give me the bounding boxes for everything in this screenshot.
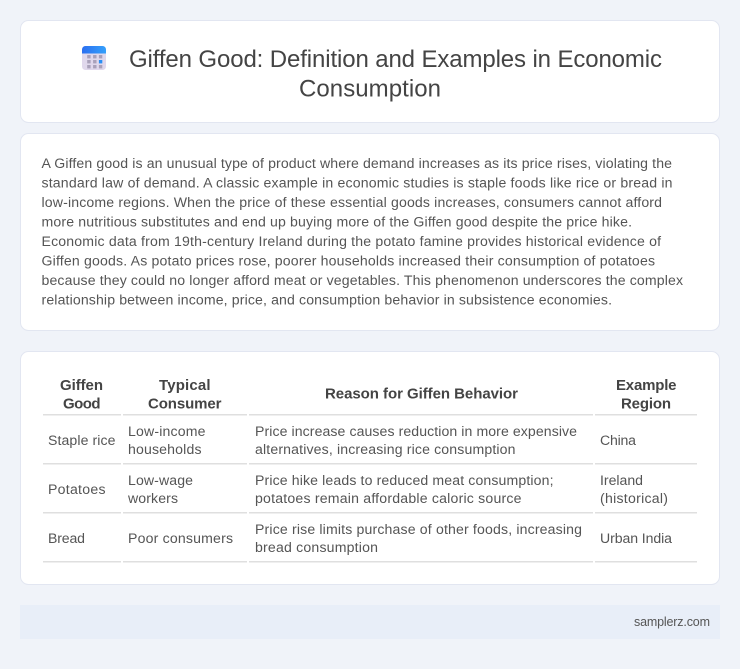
table row: bread: Urban India	[600, 530, 672, 546]
table row: potatoes	[48, 472, 668, 506]
table header: Region	[621, 396, 671, 412]
table header: Example	[616, 377, 676, 394]
table row: potatoes: Price hike leads to reduced meat consumption;	[255, 472, 554, 488]
table header: Typical	[159, 377, 210, 394]
text block: definition paragraph: A Giffen good is an unusual type of product where demand increases as its price rises, violating the	[42, 155, 672, 171]
panel: definition text	[20, 134, 720, 330]
table row: bread: bread consumption	[255, 539, 378, 555]
table row: bread	[48, 521, 672, 555]
table row: potatoes: Ireland	[600, 472, 643, 488]
text block: definition paragraph: more nutritious substitutes and end up buying more of the Giffen good despite the price hike.	[42, 214, 632, 230]
title: Giffen Good: Definition and Examples in Economic	[129, 46, 662, 73]
table row: potatoes: (historical)	[600, 490, 668, 506]
footer source text: samplerz.com	[634, 615, 710, 629]
text block: definition paragraph: low-income regions. When the price of these essential goods increases, consumers cannot afford	[42, 194, 662, 210]
text block: definition paragraph: relationship between income, price, and consumption behavior in subsistence economies.	[42, 292, 612, 308]
table header: Giffen	[60, 377, 103, 394]
table row: potatoes: Low-wage	[128, 472, 193, 488]
table row: potatoes: workers	[127, 490, 178, 506]
table header: Consumer	[148, 396, 222, 412]
table row: staple rice: Low-income	[128, 423, 206, 439]
icon: calendar	[82, 46, 106, 70]
table row: bread: Poor consumers	[128, 530, 233, 546]
table header: Reason for Giffen Behavior	[325, 386, 518, 402]
panel: table	[20, 352, 720, 584]
table row: bread: Price rise limits purchase of other foods, increasing	[255, 521, 582, 537]
text block: definition paragraph: Economic data from 19th-century Ireland during the potato famine provides historical evidence of	[42, 233, 661, 249]
table row: staple rice: China	[600, 432, 636, 448]
title	[129, 46, 662, 102]
text block: definition paragraph: standard law of demand. A classic example in economic studies is staple foods like rice or bread in	[42, 174, 672, 190]
text block: definition paragraph: Giffen goods. As potato prices rose, poorer households increased their consumption of potatoes	[42, 252, 655, 268]
table row: staple rice: Staple rice	[48, 432, 116, 448]
table row: staple rice: Price increase causes reduction in more expensive	[255, 423, 577, 439]
table row: staple rice: alternatives, increasing rice consumption	[255, 441, 516, 457]
table rules	[43, 414, 697, 562]
text block: definition paragraph: because they could no longer afford meat or vegetables. This phenomenon underscores the complex	[42, 272, 683, 288]
header panel	[20, 20, 720, 122]
table header: Good	[63, 396, 100, 412]
text block: definition paragraph	[42, 155, 683, 308]
table row: potatoes: Potatoes	[48, 481, 106, 497]
table row: staple rice: households	[128, 441, 202, 457]
table header	[60, 377, 676, 412]
table row: bread: Bread	[48, 530, 85, 546]
title: Consumption	[299, 76, 441, 102]
footer bar	[20, 605, 720, 639]
table row: staple rice	[48, 423, 636, 457]
table row: potatoes: potatoes remain affordable caloric source	[255, 490, 522, 506]
